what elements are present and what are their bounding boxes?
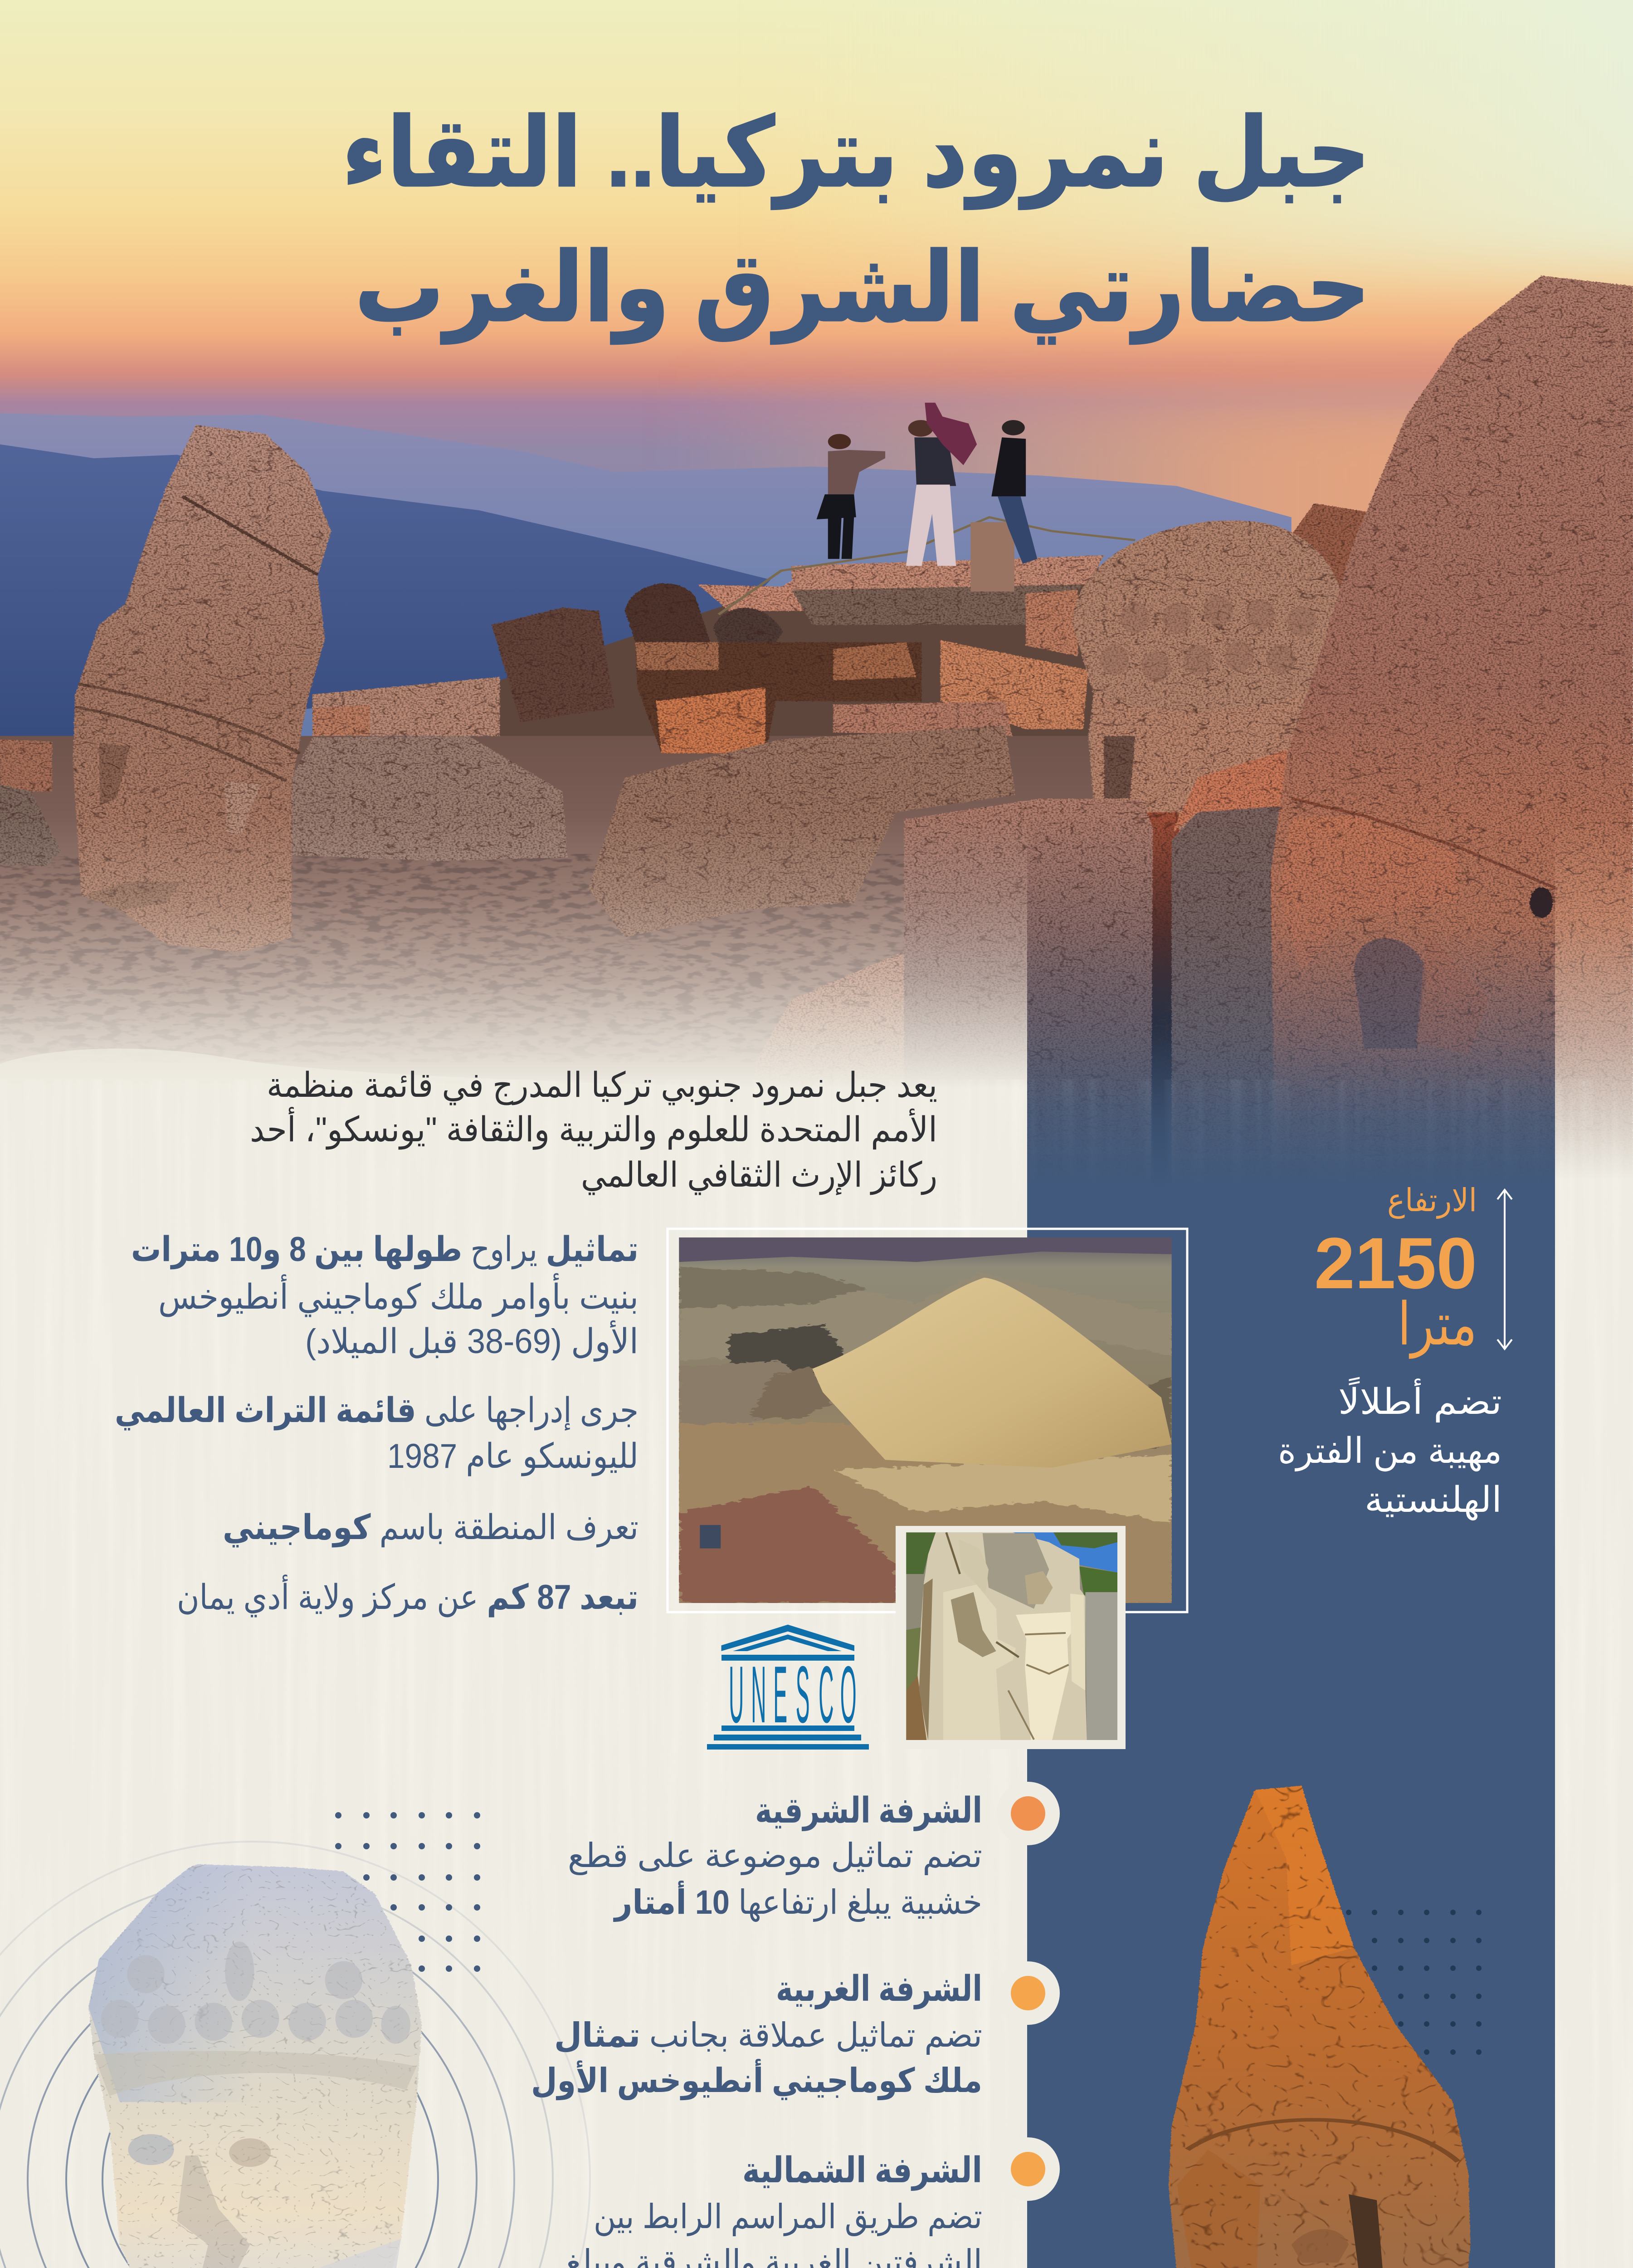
north terrace: تضم طريق المراسم الرابط بين	[594, 2198, 982, 2236]
dot grid on blue	[1346, 1910, 1482, 2055]
paper grain	[0, 1080, 1633, 2268]
light paper cloud	[0, 1049, 1027, 1125]
relief photo: Antiochus and Heracles	[896, 1526, 1126, 1749]
left statue	[73, 425, 331, 953]
paper covering the lower part of the photo	[0, 1089, 1633, 1207]
standing front blocks	[755, 750, 1292, 1194]
fact: Commagene: تعرف المنطقة باسم كوماجيني	[223, 1508, 639, 1548]
west terrace: ملك كوماجيني أنطيوخس الأول	[531, 2058, 982, 2101]
fact: world heritage list: جرى إدراجها على قائمة التراث العالمي	[115, 1391, 639, 1431]
round-haired statue	[1072, 520, 1344, 854]
west terrace	[531, 1969, 982, 2101]
hair curls	[101, 1941, 410, 2044]
fact: built by Antiochus: بنيت بأوامر ملك كوماجيني أنطيوخس	[158, 1273, 639, 1317]
east terrace: الشرفة الشرقية	[755, 1790, 982, 1831]
fade of hero photo into paper, right side	[1555, 816, 1633, 1180]
curls of hair	[1100, 596, 1316, 682]
distant mountains and stones	[0, 276, 1633, 1208]
north terrace: الشرفة الشمالية	[742, 2150, 982, 2191]
fact: built by Antiochus: الأول (69-38 قبل الميلاد)	[305, 1320, 639, 1362]
side description: الهلنستية	[1365, 1480, 1502, 1520]
altitude label: الارتفاع	[1387, 1183, 1477, 1219]
west terrace: تضم تماثيل عملاقة بجانب تمثال	[554, 2016, 982, 2055]
blue side panel	[1027, 816, 1555, 2268]
east terrace: خشبية يبلغ ارتفاعها 10 أمتار	[613, 1880, 982, 1922]
fact: world heritage list	[115, 1391, 639, 1476]
title: حضارتي الشرق والغرب	[355, 234, 1370, 345]
east terrace	[568, 1790, 982, 1922]
UNESCO logo	[707, 1625, 869, 1750]
dot grid on paper	[335, 1812, 480, 1972]
aerial photograph	[679, 1237, 1172, 1603]
west terrace: الشرفة الغربية	[776, 1969, 982, 2009]
pale statue head photo	[88, 1864, 422, 2268]
sky	[0, 0, 1633, 635]
marker: north terrace	[996, 2137, 1060, 2201]
marker: east terrace	[996, 1782, 1060, 1845]
hero photo: sunset over Mount Nemrut statues	[0, 0, 1633, 1208]
UNESCO wordmark: UNESCO	[729, 1649, 857, 1740]
altitude callout	[1278, 1183, 1512, 1520]
terrace descriptions	[531, 1790, 982, 2268]
orange statue head	[1169, 1786, 1471, 2268]
side description: تضم أطلالًا	[1338, 1377, 1502, 1422]
relief frame	[896, 1526, 1126, 1749]
fact: distance: تبعد 87 كم عن مركز ولاية أدي يمان	[177, 1574, 639, 1618]
intro paragraph	[250, 1066, 937, 1195]
terrace markers	[996, 1782, 1060, 2201]
temple roof	[721, 1625, 854, 1651]
side description	[1278, 1377, 1502, 1520]
fact: built by Antiochus	[158, 1273, 639, 1362]
fact: statue height: تماثيل يراوح طولها بين 8 و10 مترات	[131, 1230, 639, 1270]
arrow: height span	[1497, 1190, 1512, 1349]
fade of hero photo into paper, left side	[0, 816, 1027, 1089]
relief photograph	[906, 1532, 1118, 1740]
title: جبل نمرود بتركيا.. التقاء	[342, 99, 1370, 210]
north terrace	[565, 2150, 982, 2268]
altitude number: 2150	[1314, 1222, 1477, 1304]
three visitors and rope	[719, 403, 1135, 615]
fact: world heritage list: لليونسكو عام 1987	[387, 1437, 639, 1476]
aerial photo of the tumulus	[668, 1229, 1187, 1612]
east terrace: تضم تماثيل موضوعة على قطع	[568, 1837, 982, 1875]
giant statue on right	[1271, 276, 1633, 1194]
title	[342, 99, 1370, 345]
facts list	[115, 1230, 639, 1618]
marker: west terrace	[996, 1961, 1060, 2025]
intro paragraph: الأمم المتحدة للعلوم والتربية والثقافة "يونسكو"، أحد	[250, 1107, 937, 1150]
side description: مهيبة من الفترة	[1278, 1431, 1502, 1472]
intro paragraph: ركائز الإرث الثقافي العالمي	[581, 1156, 937, 1195]
altitude unit: مترا	[1398, 1291, 1477, 1359]
intro paragraph: يعد جبل نمرود جنوبي تركيا المدرج في قائمة منظمة	[267, 1066, 937, 1105]
concentric circles	[0, 1842, 590, 2268]
white frame	[668, 1229, 1187, 1612]
